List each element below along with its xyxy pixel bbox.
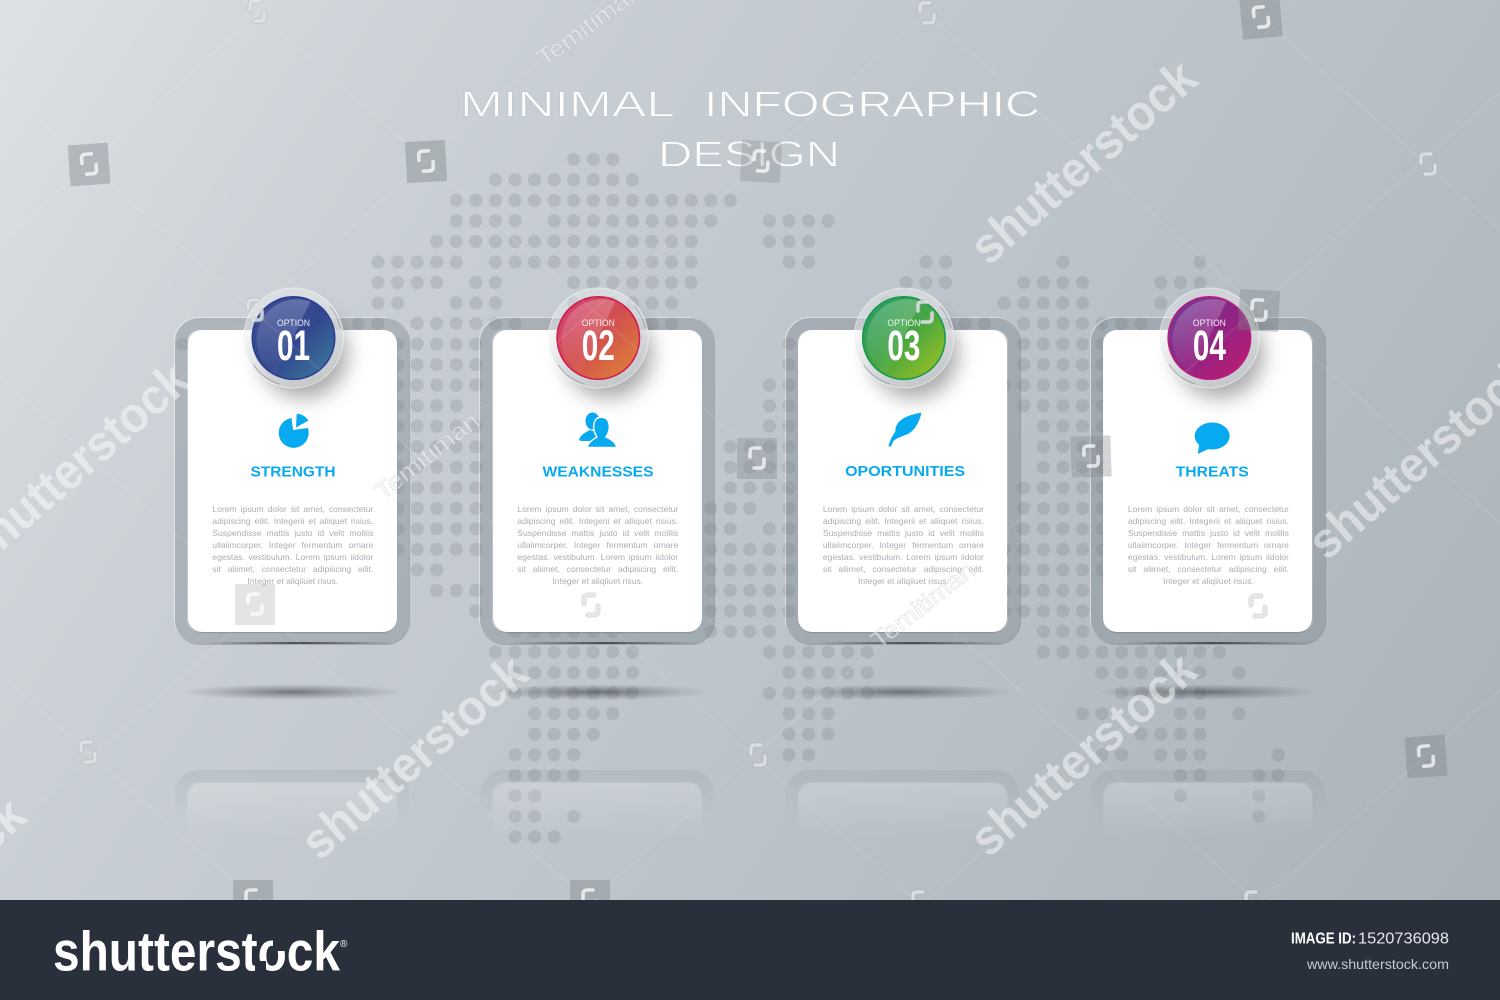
badge 04: 04 [1192,322,1226,370]
heading: strength: STRENGTH [250,464,336,480]
badge 01: 01 [277,322,310,370]
body text: adipiscing eilit. Integerii et aliiquet risius. [823,516,984,526]
body text: egestas. vestibulum. Lorem ipsum iidolor [517,552,678,562]
frame bottom edge [816,642,1006,644]
body text [823,504,984,586]
body text: ullaiimcorper. Integer fermentum ornare [823,540,984,550]
badge 02: 02 [582,322,615,370]
body text: Suspendisse mattis justo id velit molilis [823,528,984,538]
white sheet [798,330,1007,632]
contributor watermarks [370,0,981,655]
card frame [786,318,1020,644]
heading: threats: THREATS [1175,464,1249,480]
body text: ullaiimcorper. Integer fermentum ornare [517,540,678,550]
body text: egestas. vestibulum. Lorem ipsum iidolor [823,552,984,562]
body text: Suspendisse mattis justo id velit molilis [212,528,373,538]
badge, icon and heading [1160,288,1275,480]
title: MINIMAL [460,84,675,124]
body text: egestas. vestibulum. Lorem ipsum iidolor [1128,552,1289,562]
body text: Integer et aliqiiuet risus. [1163,576,1254,586]
image id: 1520736098 [1358,930,1449,947]
body text: sit aliimet, consectetur adipiscing eilit. [517,564,678,574]
badge 02: OPTION [582,318,615,328]
body text [212,504,374,586]
badge 03: 03 [887,322,920,370]
body text: adipiscing eilit. Integerii et aliiquet risius. [517,516,678,526]
body text: sit aliimet, consectetur adipiscing eilit. [823,564,984,574]
title: INFOGRAPHIC [704,84,1040,124]
card frame [480,318,714,644]
body text: sit aliimet, consectetur adipiscing eilit. [212,564,373,574]
body text: ullaiimcorper. Integer fermentum ornare [212,540,373,550]
card frame [175,318,409,644]
shutterstock watermarks: shutterstock [959,49,1207,275]
body text: Lorem ipsum dolor sit amet, consectetur [517,504,678,514]
body text [1128,504,1289,586]
shutterstock watermarks: shutterstock [959,641,1207,867]
badge 03: OPTION [887,318,920,328]
body text: Integer et aliqiiuet risus. [247,576,338,586]
body text: Suspendisse mattis justo id velit molilis [517,528,678,538]
title: DESIGN [658,134,840,174]
image id [1291,930,1449,947]
heading: weaknesses: WEAKNESSES [542,464,654,480]
footer bar [0,900,1500,1000]
website: www.shutterstock.com [1307,956,1449,972]
icon: feather [888,413,921,446]
body text: adipiscing eilit. Integerii et aliiquet risius. [1128,516,1289,526]
card frame [1091,318,1325,644]
white sheet [1103,330,1312,632]
contributor watermarks: Temitiman [866,556,981,655]
badge 02 [548,288,652,398]
white sheet [493,330,702,632]
body text: egestas. vestibulum. Lorem ipsum iidolor [212,552,373,562]
heading: oportunities: OPORTUNITIES [845,464,965,480]
shutterstock watermarks: shutterstock [290,644,538,870]
icon: pie chart [279,414,309,448]
shutterstock logo: ® [340,939,348,950]
badge 01 [244,288,348,398]
panel: option 03 oportunities [785,288,1021,645]
panel: option 02 weaknesses [479,288,715,645]
icon: two people [579,412,617,448]
body text: Integer et aliqiiuet risus. [858,576,949,586]
body text: Lorem ipsum dolor sit amet, consectetur [1128,504,1289,514]
frame bottom edge [510,642,700,644]
body text: sit aliimet, consectetur adipiscing eilit. [1128,564,1289,574]
body text: Suspendisse mattis justo id velit molilis [1128,528,1289,538]
white sheet [188,330,397,632]
body text: Lorem ipsum dolor sit amet, consectetur [212,504,373,514]
badge, icon and heading [542,288,664,480]
body text: Lorem ipsum dolor sit amet, consectetur [823,504,984,514]
frame bottom edge [1121,642,1311,644]
badge, icon and heading [244,288,359,480]
badge 01: OPTION [277,318,310,328]
badge 03 [853,288,957,398]
body text [517,504,678,586]
frame bottom edge [205,642,395,644]
panel: option 04 threats [1090,288,1326,645]
body text: Integer et aliqiiuet risus. [552,576,643,586]
title [460,84,1040,174]
shutterstock logo: shutterstock [53,920,341,983]
body text: ullaiimcorper. Integer fermentum ornare [1128,540,1289,550]
badge 04 [1159,288,1263,398]
body text: adipiscing eilit. Integerii et aliiquet risius. [212,516,373,526]
badge 04: OPTION [1192,318,1225,328]
icon: speech bubble [1194,422,1229,454]
image id: IMAGE ID: [1291,930,1356,947]
badge, icon and heading [845,288,970,480]
contributor watermarks: Temitiman [370,407,485,506]
panel: option 01 strength [174,288,410,645]
